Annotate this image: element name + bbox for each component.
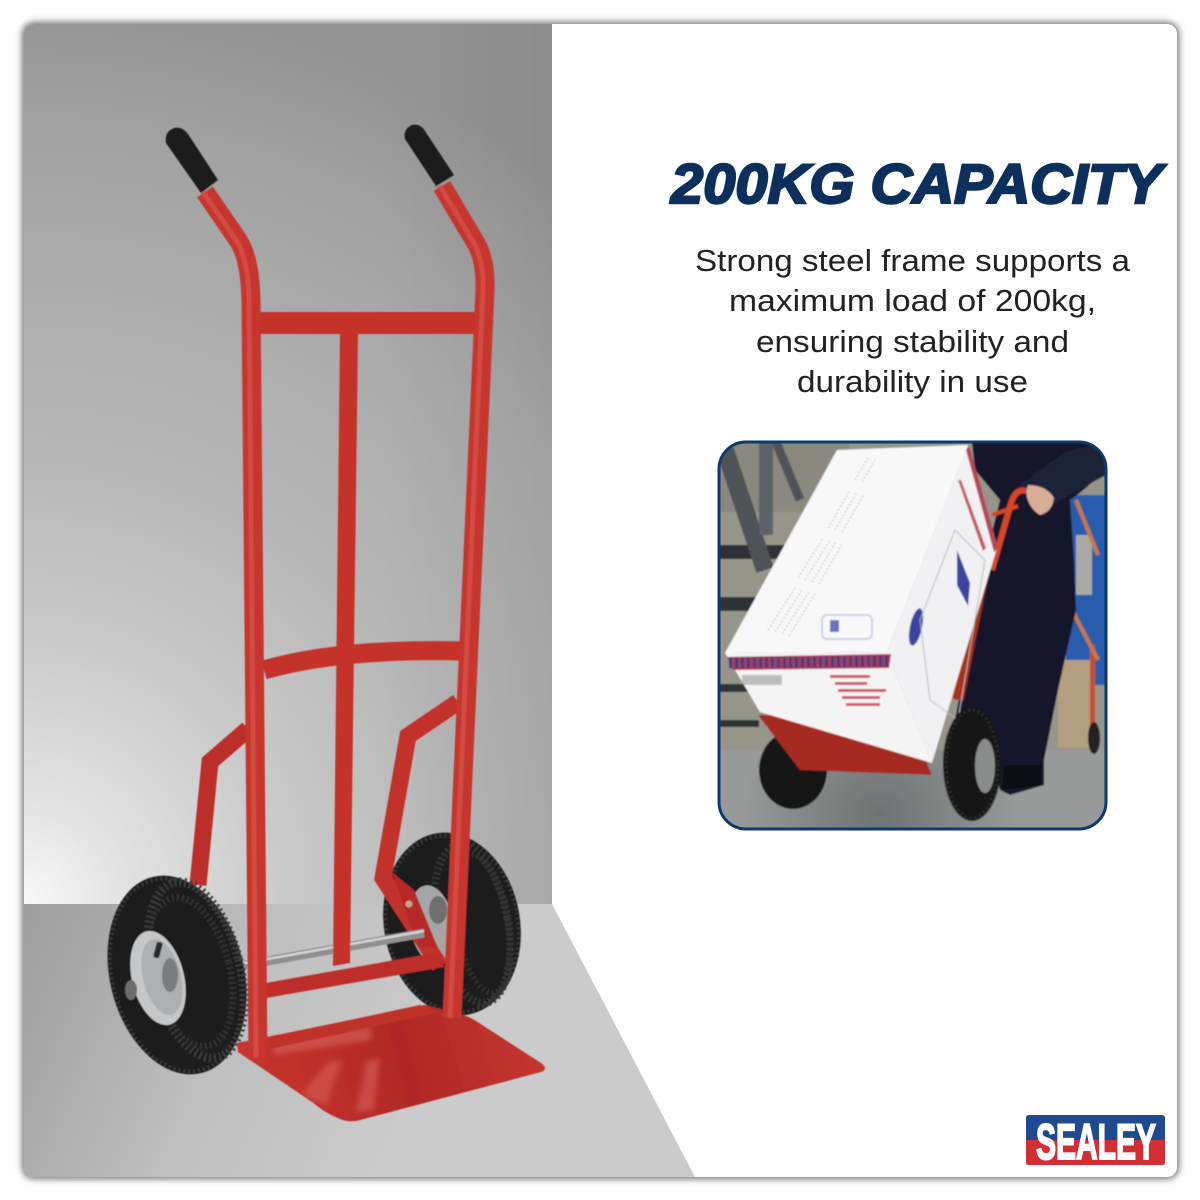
centre vertical bar xyxy=(333,334,358,966)
right wheel xyxy=(369,822,535,1026)
description text: Strong steel frame supports a xyxy=(695,243,1131,278)
description text xyxy=(695,243,1131,399)
panel: studio backdrop xyxy=(24,24,695,1177)
photo background xyxy=(719,442,1106,762)
top cross bar xyxy=(258,312,476,334)
description text: maximum load of 200kg, xyxy=(729,283,1096,318)
middle curved bar xyxy=(264,651,464,670)
lower cross bars xyxy=(266,952,444,998)
handle xyxy=(992,490,1026,570)
left wheel xyxy=(759,731,827,809)
left support arm xyxy=(198,729,248,885)
box stripes xyxy=(727,654,891,670)
box print xyxy=(830,480,986,706)
box faces xyxy=(725,445,968,653)
photo border xyxy=(719,442,1106,829)
left wheel xyxy=(88,861,266,1089)
right support arm xyxy=(383,702,458,966)
plate xyxy=(758,715,932,775)
right rail and handle xyxy=(442,186,485,1018)
description text: ensuring stability and xyxy=(756,324,1069,359)
inset photo: truck in use xyxy=(719,442,1106,835)
left hub xyxy=(121,925,195,1031)
stairs xyxy=(719,545,789,727)
base plate xyxy=(237,1005,545,1121)
person xyxy=(955,442,1105,795)
axle xyxy=(240,933,424,966)
front wheel xyxy=(943,707,1001,821)
description text: durability in use xyxy=(797,364,1028,399)
blue wall and shelving xyxy=(1066,495,1106,685)
product: red sack truck xyxy=(88,125,545,1121)
heading: 200KG capacity: 200KG CAPACITY xyxy=(670,152,1167,215)
left rail and handle xyxy=(205,192,258,1058)
